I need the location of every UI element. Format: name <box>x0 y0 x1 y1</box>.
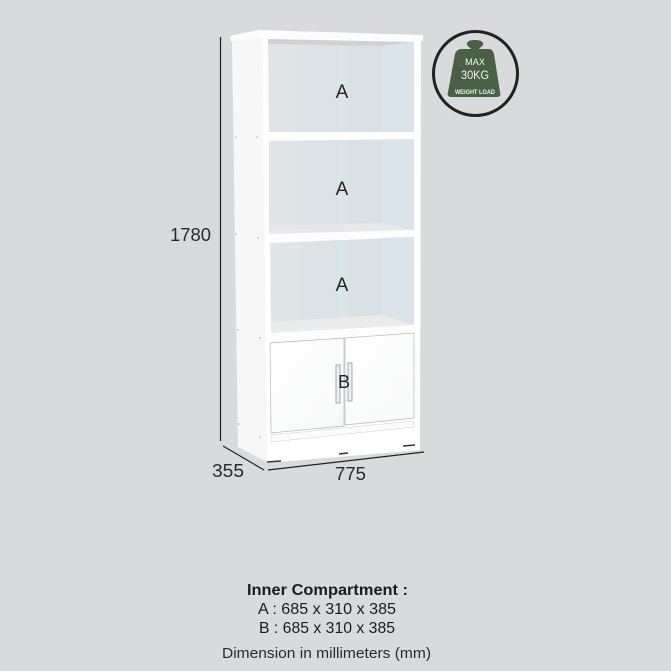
front frame <box>262 38 421 463</box>
height dimension line <box>220 37 222 441</box>
weight badge <box>434 32 518 116</box>
bookcase <box>230 30 423 463</box>
compartment 2 <box>269 139 414 234</box>
feet <box>267 445 415 462</box>
shelf 2 <box>269 230 415 243</box>
compartment A size: A : 685 x 310 x 385 <box>258 601 396 618</box>
weight text: 30KG <box>461 70 489 82</box>
left door <box>270 338 344 433</box>
units note: Dimension in millimeters (mm) <box>222 645 431 662</box>
compartment labels: A <box>336 82 349 103</box>
compartment labels <box>336 82 350 392</box>
depth dimension line <box>223 446 264 470</box>
compartment labels: A <box>336 275 349 296</box>
badge ring <box>434 32 518 116</box>
caption heading: Inner Compartment : <box>247 582 408 599</box>
door handles <box>336 363 352 403</box>
right door <box>345 333 414 425</box>
depth label: 355 <box>212 461 244 481</box>
compartment labels: B <box>338 372 350 392</box>
compartment 3 <box>270 237 414 333</box>
icon: weight <box>448 40 500 97</box>
weight text <box>455 57 496 96</box>
screw holes <box>235 136 261 438</box>
compartment 1 <box>268 39 414 132</box>
compartment B size: B : 685 x 310 x 385 <box>259 620 395 637</box>
compartment labels: A <box>336 179 349 200</box>
width dimension line <box>268 452 424 470</box>
side panel <box>232 38 267 462</box>
bottom rail <box>271 325 414 343</box>
width label: 775 <box>335 464 366 484</box>
weight text: MAX <box>465 57 486 68</box>
caption <box>222 582 431 662</box>
weight text: WEIGHT LOAD <box>455 90 496 96</box>
shelf 1 <box>268 132 415 141</box>
height label: 1780 <box>170 225 211 245</box>
plinth <box>271 421 414 442</box>
top board <box>230 30 423 42</box>
